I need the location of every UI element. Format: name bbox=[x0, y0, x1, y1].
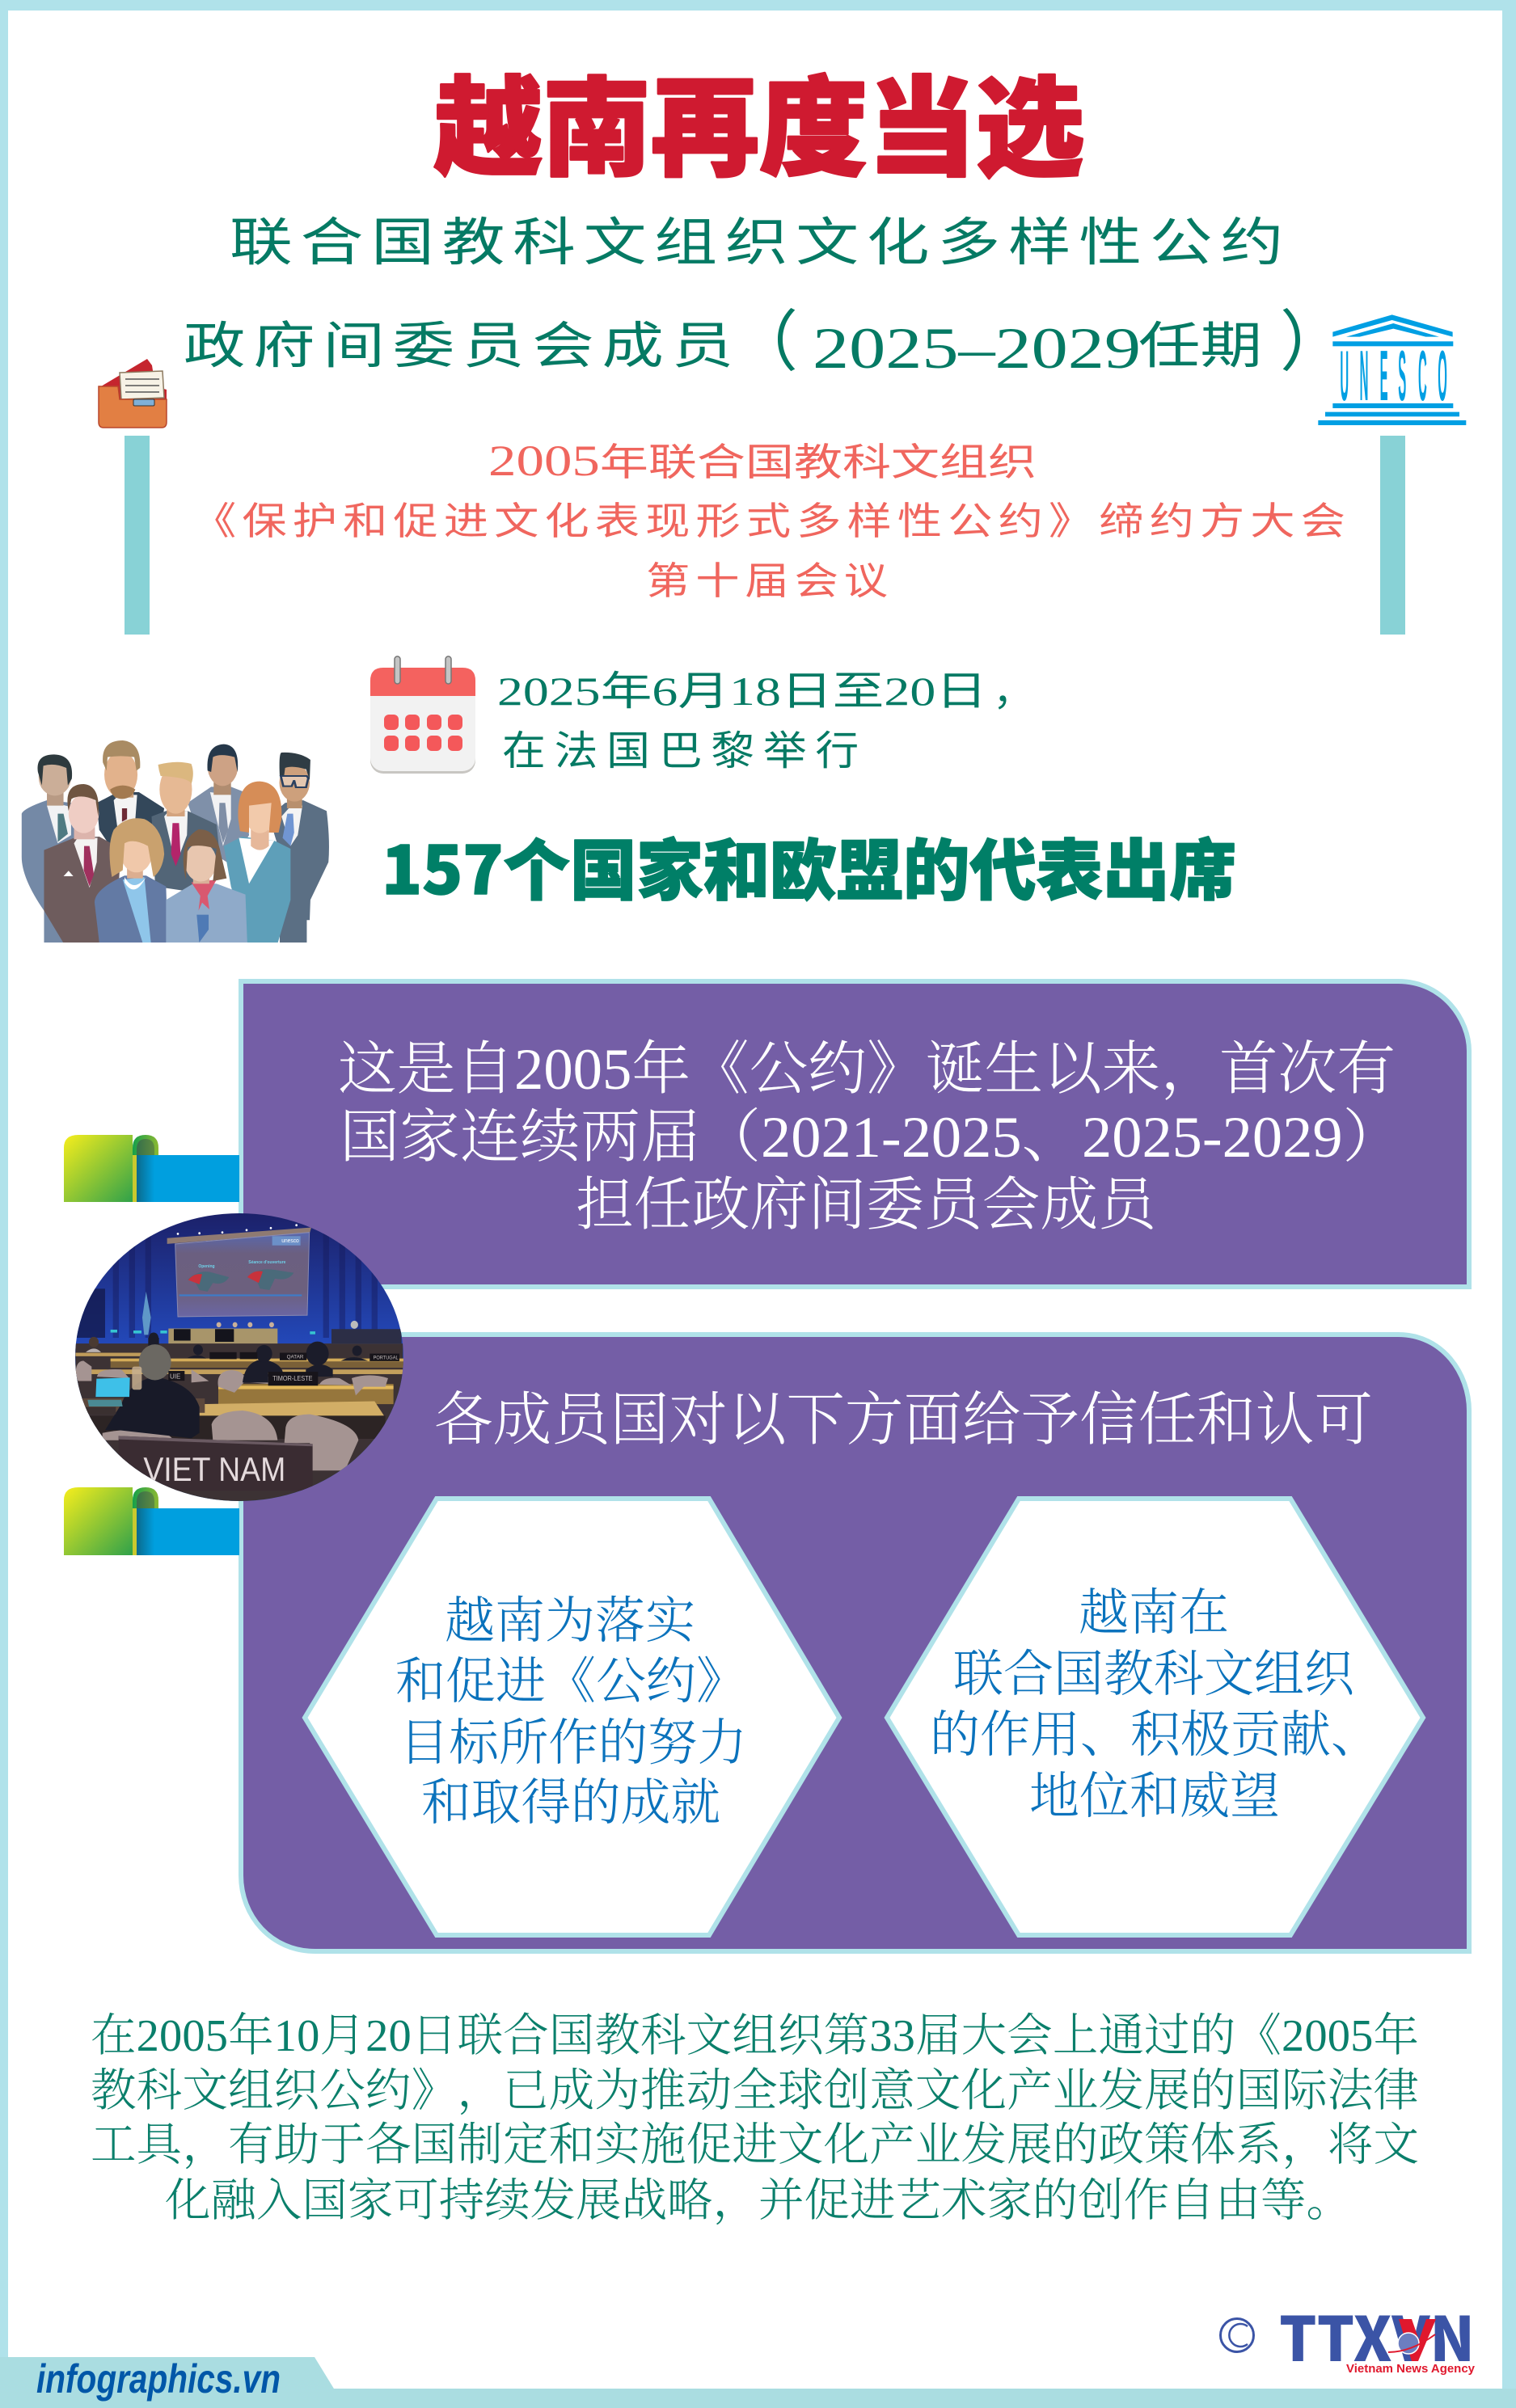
footer tab bbox=[0, 2356, 336, 2408]
hexagon: left point: 和促进《公约》 bbox=[395, 1655, 746, 1710]
brown suit man bbox=[44, 784, 121, 943]
subtitle line 2 bbox=[184, 306, 1346, 381]
woman with curly hair bbox=[95, 818, 168, 943]
VIET NAM sign bbox=[119, 1436, 313, 1491]
panel 1 text: 这是自2005年《公约》诞生以来，首次有 bbox=[338, 1037, 1396, 1102]
blond man bbox=[151, 762, 220, 892]
right man with glasses bbox=[269, 753, 329, 943]
website label: infographics.vn bbox=[36, 2356, 281, 2402]
body paragraph bbox=[91, 2011, 1419, 2226]
subtitle line 2: （ bbox=[732, 306, 798, 379]
panel: recognition bbox=[241, 1335, 1469, 1951]
hexagon: left point bbox=[305, 1499, 839, 1935]
ribbon: panel 1 bbox=[64, 1135, 239, 1202]
desks rows bbox=[75, 1353, 143, 1356]
man in suit bbox=[105, 1377, 200, 1438]
copyright symbol bbox=[1221, 2318, 1253, 2352]
icon: UNESCO logo bbox=[1318, 314, 1466, 425]
conference name text: 2005 年联合国教科文组织 bbox=[488, 436, 1037, 485]
photo: conference hall: Séance d'ouverture bbox=[248, 1260, 286, 1265]
hexagon: right point: 越南在 bbox=[1079, 1586, 1229, 1641]
panel 1 text: 国家连续两届（2021-2025、2025-2029） bbox=[340, 1105, 1403, 1170]
conference name text: 《保护和促进文化表现形式多样性公约》缔约方大会 bbox=[192, 501, 1351, 543]
photo: conference hall: UIE bbox=[170, 1373, 181, 1381]
photo: conference hall bbox=[67, 1208, 410, 1508]
body paragraph: 化融入国家可持续发展战略，并促进艺术家的创作自由等。 bbox=[165, 2176, 1352, 2226]
date text: 2025年6月18日至20日 bbox=[497, 668, 987, 714]
hexagon: left point: 越南为落实 bbox=[445, 1594, 695, 1649]
icon: UNESCO logo: UNESCO bbox=[1340, 337, 1447, 416]
photo: conference hall: QATAR bbox=[287, 1355, 304, 1360]
woman with brown hair bbox=[166, 829, 247, 943]
date text bbox=[497, 668, 1033, 774]
photo: conference hall: VIET NAM bbox=[143, 1452, 285, 1488]
logo: TTXVN: Vietnam News Agency bbox=[1346, 2362, 1476, 2376]
hexagon: right point: 的作用、积极贡献、 bbox=[930, 1708, 1381, 1763]
body paragraph: 在2005年10月20日联合国教科文组织第33届大会上通过的《2005年 bbox=[91, 2011, 1419, 2061]
photo: conference hall: unesco bbox=[281, 1238, 299, 1244]
key number heading: 157个国家和欧盟的代表出席 bbox=[382, 817, 1236, 913]
panel 1 text: 担任政府间委员会成员 bbox=[576, 1173, 1159, 1238]
hexagon: right point bbox=[887, 1499, 1423, 1935]
name plates bbox=[168, 1352, 399, 1385]
subtitle line 1: 联合国教科文组织文化多样性公约 bbox=[230, 214, 1291, 272]
bearded man bbox=[97, 740, 164, 843]
logo: TTXVN: TTXVN bbox=[1279, 2290, 1475, 2379]
icon: calendar bbox=[370, 656, 475, 774]
subtitle line 2: 2025–2029 bbox=[813, 316, 1141, 381]
conference name text: 第十届会议 bbox=[646, 561, 893, 603]
panel 1 text bbox=[338, 1037, 1403, 1238]
chairs bbox=[75, 1361, 388, 1470]
hexagon: left point: 目标所作的努力 bbox=[399, 1716, 747, 1771]
photo: conference hall: PORTUGAL bbox=[374, 1356, 399, 1361]
title: 越南再度当选 bbox=[434, 41, 1084, 198]
subtitle line 2: 政府间委员会成员 bbox=[184, 319, 741, 374]
hexagon: left point: 和取得的成就 bbox=[421, 1776, 720, 1831]
woman in teal jacket bbox=[224, 782, 290, 943]
left man bbox=[22, 754, 76, 943]
laptop bbox=[95, 1377, 130, 1397]
icon: folder bbox=[99, 359, 167, 428]
hexagon: right point: 联合国教科文组织 bbox=[953, 1647, 1355, 1702]
photo: conference hall: Opening bbox=[198, 1264, 215, 1269]
hexagon: right point: 地位和威望 bbox=[1029, 1769, 1280, 1824]
right bar bbox=[1380, 436, 1405, 635]
subtitle line 2: 任期 bbox=[1138, 319, 1262, 374]
photo: conference hall: TIMOR-LESTE bbox=[272, 1375, 312, 1382]
left bar bbox=[125, 436, 150, 635]
body paragraph: 工具，有助于各国制定和实施促进文化产业发展的政策体系，将文 bbox=[91, 2120, 1419, 2170]
date text: ， bbox=[993, 668, 1033, 714]
dark haired man bbox=[188, 744, 249, 865]
panel: first achievement bbox=[241, 981, 1469, 1287]
body paragraph: 教科文组织公约》，已成为推动全球创意文化产业发展的国际法律 bbox=[91, 2066, 1419, 2116]
attendees bbox=[148, 1333, 368, 1382]
panel 2 heading: 各成员国对以下方面给予信任和认可 bbox=[434, 1388, 1373, 1453]
conference name text bbox=[192, 436, 1351, 603]
illustration: group of delegates bbox=[22, 740, 329, 943]
ribbon: panel 2 bbox=[64, 1487, 239, 1555]
date text: 在法国巴黎举行 bbox=[502, 728, 868, 774]
subtitle line 2: ） bbox=[1280, 306, 1346, 379]
